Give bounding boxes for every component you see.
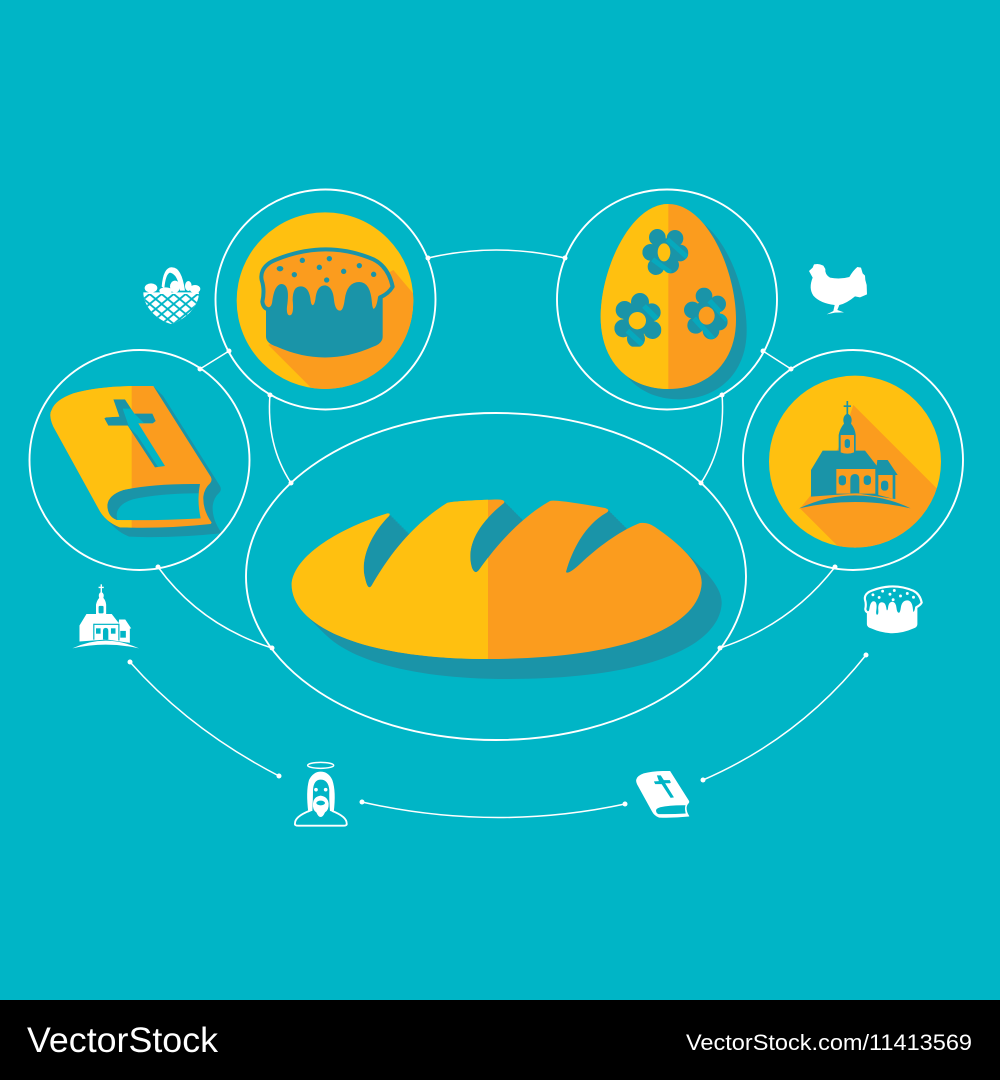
footer logo text: VectorStock <box>27 1021 219 1060</box>
icon: white basket <box>142 267 202 326</box>
icon: white book <box>636 771 689 818</box>
footer bar <box>0 1000 1000 1080</box>
icon: easter cake <box>236 212 414 389</box>
icon: bread loaf <box>292 499 722 679</box>
satellite ring: church <box>743 350 963 570</box>
icon: white saint figure <box>295 762 347 826</box>
satellite ring: cake <box>216 190 436 410</box>
icon: bible book <box>50 386 221 537</box>
satellite ring: book <box>30 350 250 570</box>
icon: white hen <box>809 264 867 314</box>
icon: white church <box>72 584 139 648</box>
flower: lower left <box>614 293 662 347</box>
footer url text: VectorStock.com/11413569 <box>686 1030 972 1055</box>
flower: lower right <box>684 288 728 340</box>
icon: white cake <box>865 586 922 633</box>
satellite ring: egg <box>557 190 777 410</box>
icon: church on hill <box>769 376 941 548</box>
icon: easter egg <box>601 204 747 399</box>
central ring <box>246 413 746 740</box>
flower: top <box>642 229 688 275</box>
connector network <box>128 250 868 818</box>
